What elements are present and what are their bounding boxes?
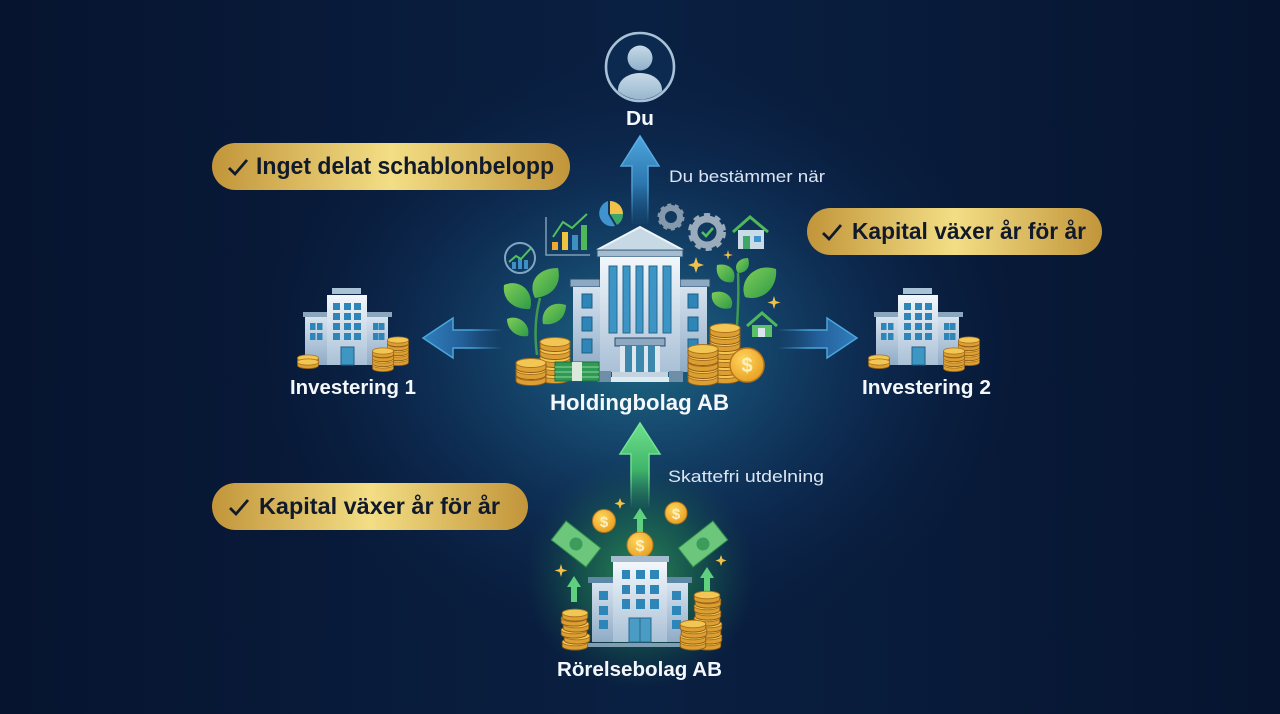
coin stacks left (516, 338, 570, 386)
icon: Investering 2 building (868, 288, 980, 372)
line chart (546, 214, 590, 255)
sparkles (554, 498, 726, 577)
banknotes (551, 521, 728, 567)
callout: Kapital växer år för år (left) (212, 483, 528, 530)
icon: Holdingbolag building group (504, 201, 780, 386)
callout: Inget delat schablonbelopp (212, 143, 570, 190)
company building (587, 556, 693, 647)
icon: Investering 1 building (298, 288, 408, 372)
person icon: Du (606, 33, 674, 104)
arrow: to Investering 2 (777, 318, 857, 358)
text: Du bestämmer när: Du bestämmer när (669, 168, 826, 186)
label: Rörelsebolag AB: Rörelsebolag AB (557, 658, 722, 681)
coin stacks (561, 591, 722, 650)
label: Investering 2: Investering 2 (862, 377, 991, 399)
label: Holdingbolag AB: Holdingbolag AB (550, 390, 729, 415)
small chart badge (505, 243, 535, 273)
arrow: up to Du (621, 136, 659, 224)
icon: Rörelsebolag group (551, 498, 728, 650)
coin stacks right (688, 324, 740, 386)
callout: Inget delat schablonbelopp: Inget delat schablonbelopp (256, 153, 554, 180)
falling coins: $ (600, 514, 609, 531)
callout: Kapital växer år för år (left): Kapital växer år för år (259, 493, 500, 519)
gears (659, 205, 724, 249)
falling coins (592, 502, 687, 558)
callout: Kapital växer år för år (right): Kapital växer år för år (852, 218, 1086, 244)
pie chart (599, 201, 623, 226)
label: Investering 1: Investering 1 (290, 377, 416, 399)
left plant (504, 268, 566, 355)
small green arrows (567, 508, 714, 602)
arrow: to Investering 1 (423, 318, 503, 358)
banknotes (555, 362, 599, 381)
sparkles (688, 250, 780, 309)
small house (747, 313, 777, 337)
falling coins: $ (636, 538, 645, 555)
big dollar coin: $ (741, 355, 753, 377)
callout: Kapital växer år för år (right) (807, 208, 1102, 255)
text: Skattefri utdelning: Skattefri utdelning (668, 467, 824, 486)
big dollar coin (730, 348, 764, 382)
label: Du: Du (626, 108, 654, 130)
arrow: up from Rörelsebolag (620, 423, 660, 508)
house top right (733, 217, 768, 249)
bank building (570, 227, 710, 382)
falling coins: $ (672, 506, 681, 523)
right plant (712, 258, 776, 325)
